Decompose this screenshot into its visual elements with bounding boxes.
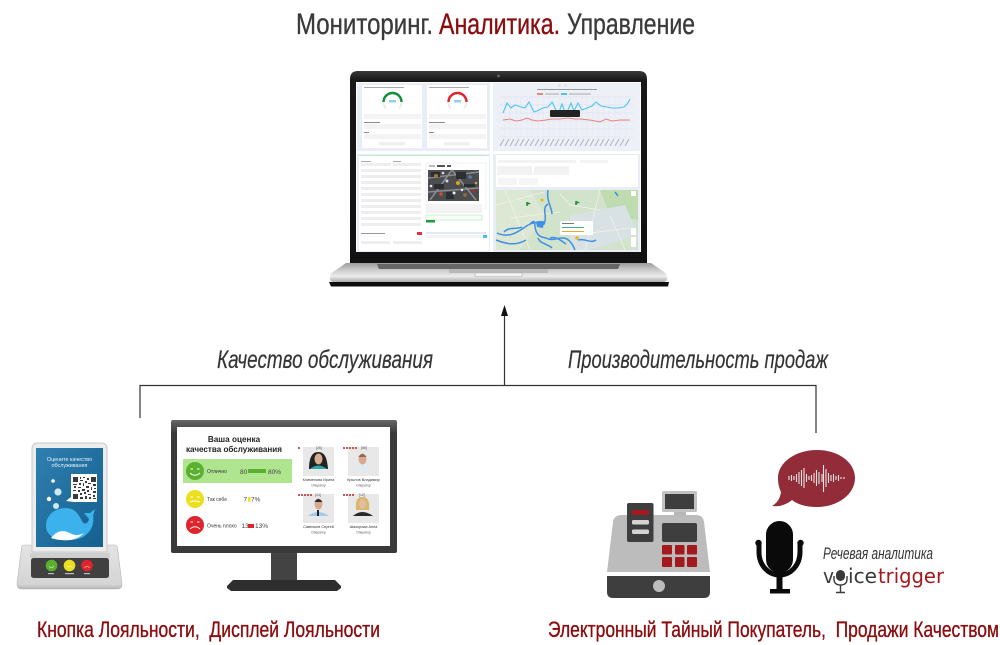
title: Управление [567,8,695,41]
speech bubble with waveform [772,450,855,507]
rating row: very bad: 13% [255,523,268,530]
label: service quality: Качество обслуживания [217,346,433,374]
laptop with dashboard [329,71,669,286]
operator card 4: [12] [359,493,365,497]
loyalty display monitor [171,420,397,591]
operator card 4: Шахорова Анна [350,525,378,529]
operator card 2: Оператор [356,484,371,488]
operator card 4 [343,493,379,534]
gauge card left [362,85,422,148]
map [496,190,638,250]
operator card 4: Оператор [356,530,371,534]
register drawer [607,576,710,598]
register keypad [662,545,697,567]
operator card 2: Крылов Владимир [347,478,380,482]
rating row: so-so: 7 [244,496,248,504]
operator card 1: [26] [316,446,322,450]
rating row: excellent: 80 [240,469,248,476]
rating row: excellent [183,459,292,483]
loyalty button device: обслуживания [52,463,88,469]
rating buttons [46,560,93,574]
voice analytics label: Речевая аналитика [823,545,933,563]
title: Аналитика. [439,8,560,41]
screen heading: Ваша оценка [208,435,261,444]
rating row: very bad: 13 [242,523,249,530]
rating row: very bad: Очень плохо [207,524,237,530]
form panel [359,155,489,251]
operator card 1: Оператор [311,484,326,488]
whale [46,479,95,540]
label: sales performance: Производительность продаж [568,346,829,374]
line chart [493,83,640,151]
arrow head [501,305,508,316]
voicetrigger logo: trigger [878,564,945,588]
rating row: very bad [186,516,268,534]
caption: loyalty products: Кнопка Лояльности, Дисплей Лояльности [37,617,380,642]
register body [607,515,710,572]
QR code [66,474,97,502]
operator card 2: [85] [361,446,367,450]
rating row: excellent: 80% [268,469,281,476]
device base [17,545,122,589]
operator card 3: Оператор [311,530,326,534]
cash register [607,491,710,598]
operator card 2 [343,446,380,488]
filter panel [496,155,638,187]
register screen [662,523,697,542]
operator card 3: [14] [315,493,321,497]
laptop base [329,282,669,286]
monitor screen [177,427,390,546]
operator card 3: Савельев Сергей [303,525,334,529]
screen heading [186,435,282,454]
voicetrigger logo [823,564,945,592]
laptop lid [350,71,647,264]
microphone icon [755,521,804,594]
rating row: excellent: Отлично [207,469,227,475]
rating row: so-so: Так себе [207,497,227,503]
connector lines [140,312,816,433]
title: Мониторинг. [296,8,433,41]
button panel [31,558,109,578]
laptop screen [356,82,641,252]
register customer display [662,491,697,512]
screen heading: качества обслуживания [186,444,282,454]
voicetrigger logo: ice [848,564,877,588]
gauge card right [427,85,487,148]
loyalty button device [17,443,122,589]
rating row: so-so: 7% [251,496,261,504]
monitor frame [171,420,397,553]
voicetrigger logo: v [823,564,834,588]
device tablet [32,443,107,552]
operator card 1 [298,446,335,488]
street photo [428,170,479,201]
monitor stand [271,553,297,581]
register receipt panel [627,503,654,542]
title [296,8,695,41]
operator card 1: Клименова Ирина [303,478,335,482]
operator card 3 [298,493,334,534]
rating row: so-so [186,490,261,508]
tablet heading: Оцените качество [47,457,92,463]
